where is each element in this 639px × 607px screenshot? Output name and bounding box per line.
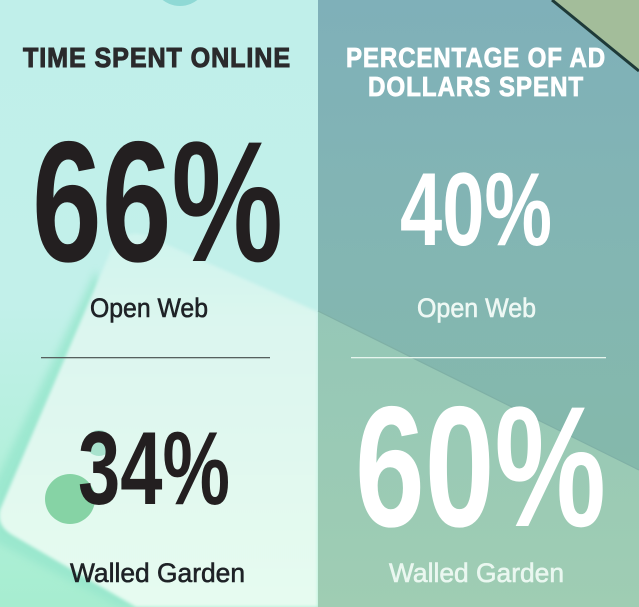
stat: 66% open web: 66% bbox=[32, 106, 283, 298]
heading: percentage of ad dollars spent bbox=[346, 42, 606, 102]
label: walled garden right: Walled Garden bbox=[389, 558, 564, 588]
divider left bbox=[41, 357, 270, 358]
panel: time spent online bbox=[0, 0, 318, 607]
icon: circle at top of photo bbox=[152, 0, 208, 6]
heading: percentage of ad dollars spent: DOLLARS SPENT bbox=[368, 71, 584, 102]
phone body right bbox=[318, 311, 639, 607]
paper corner bbox=[552, 0, 639, 71]
heading: time spent online: TIME SPENT ONLINE bbox=[23, 42, 291, 73]
divider right bbox=[351, 357, 606, 358]
label: walled garden left: Walled Garden bbox=[70, 558, 245, 588]
panel: percentage of ad dollars spent bbox=[318, 0, 639, 607]
label: open web left: Open Web bbox=[90, 293, 208, 323]
stat: 34% walled garden: 34% bbox=[78, 411, 230, 527]
stat: 40% open web: 40% bbox=[400, 152, 552, 268]
phone body bbox=[0, 234, 318, 607]
phone shadow bbox=[0, 270, 150, 607]
icon: phone camera bbox=[86, 430, 112, 456]
label: open web right: Open Web bbox=[417, 293, 536, 323]
icon: phone button bbox=[45, 474, 95, 524]
